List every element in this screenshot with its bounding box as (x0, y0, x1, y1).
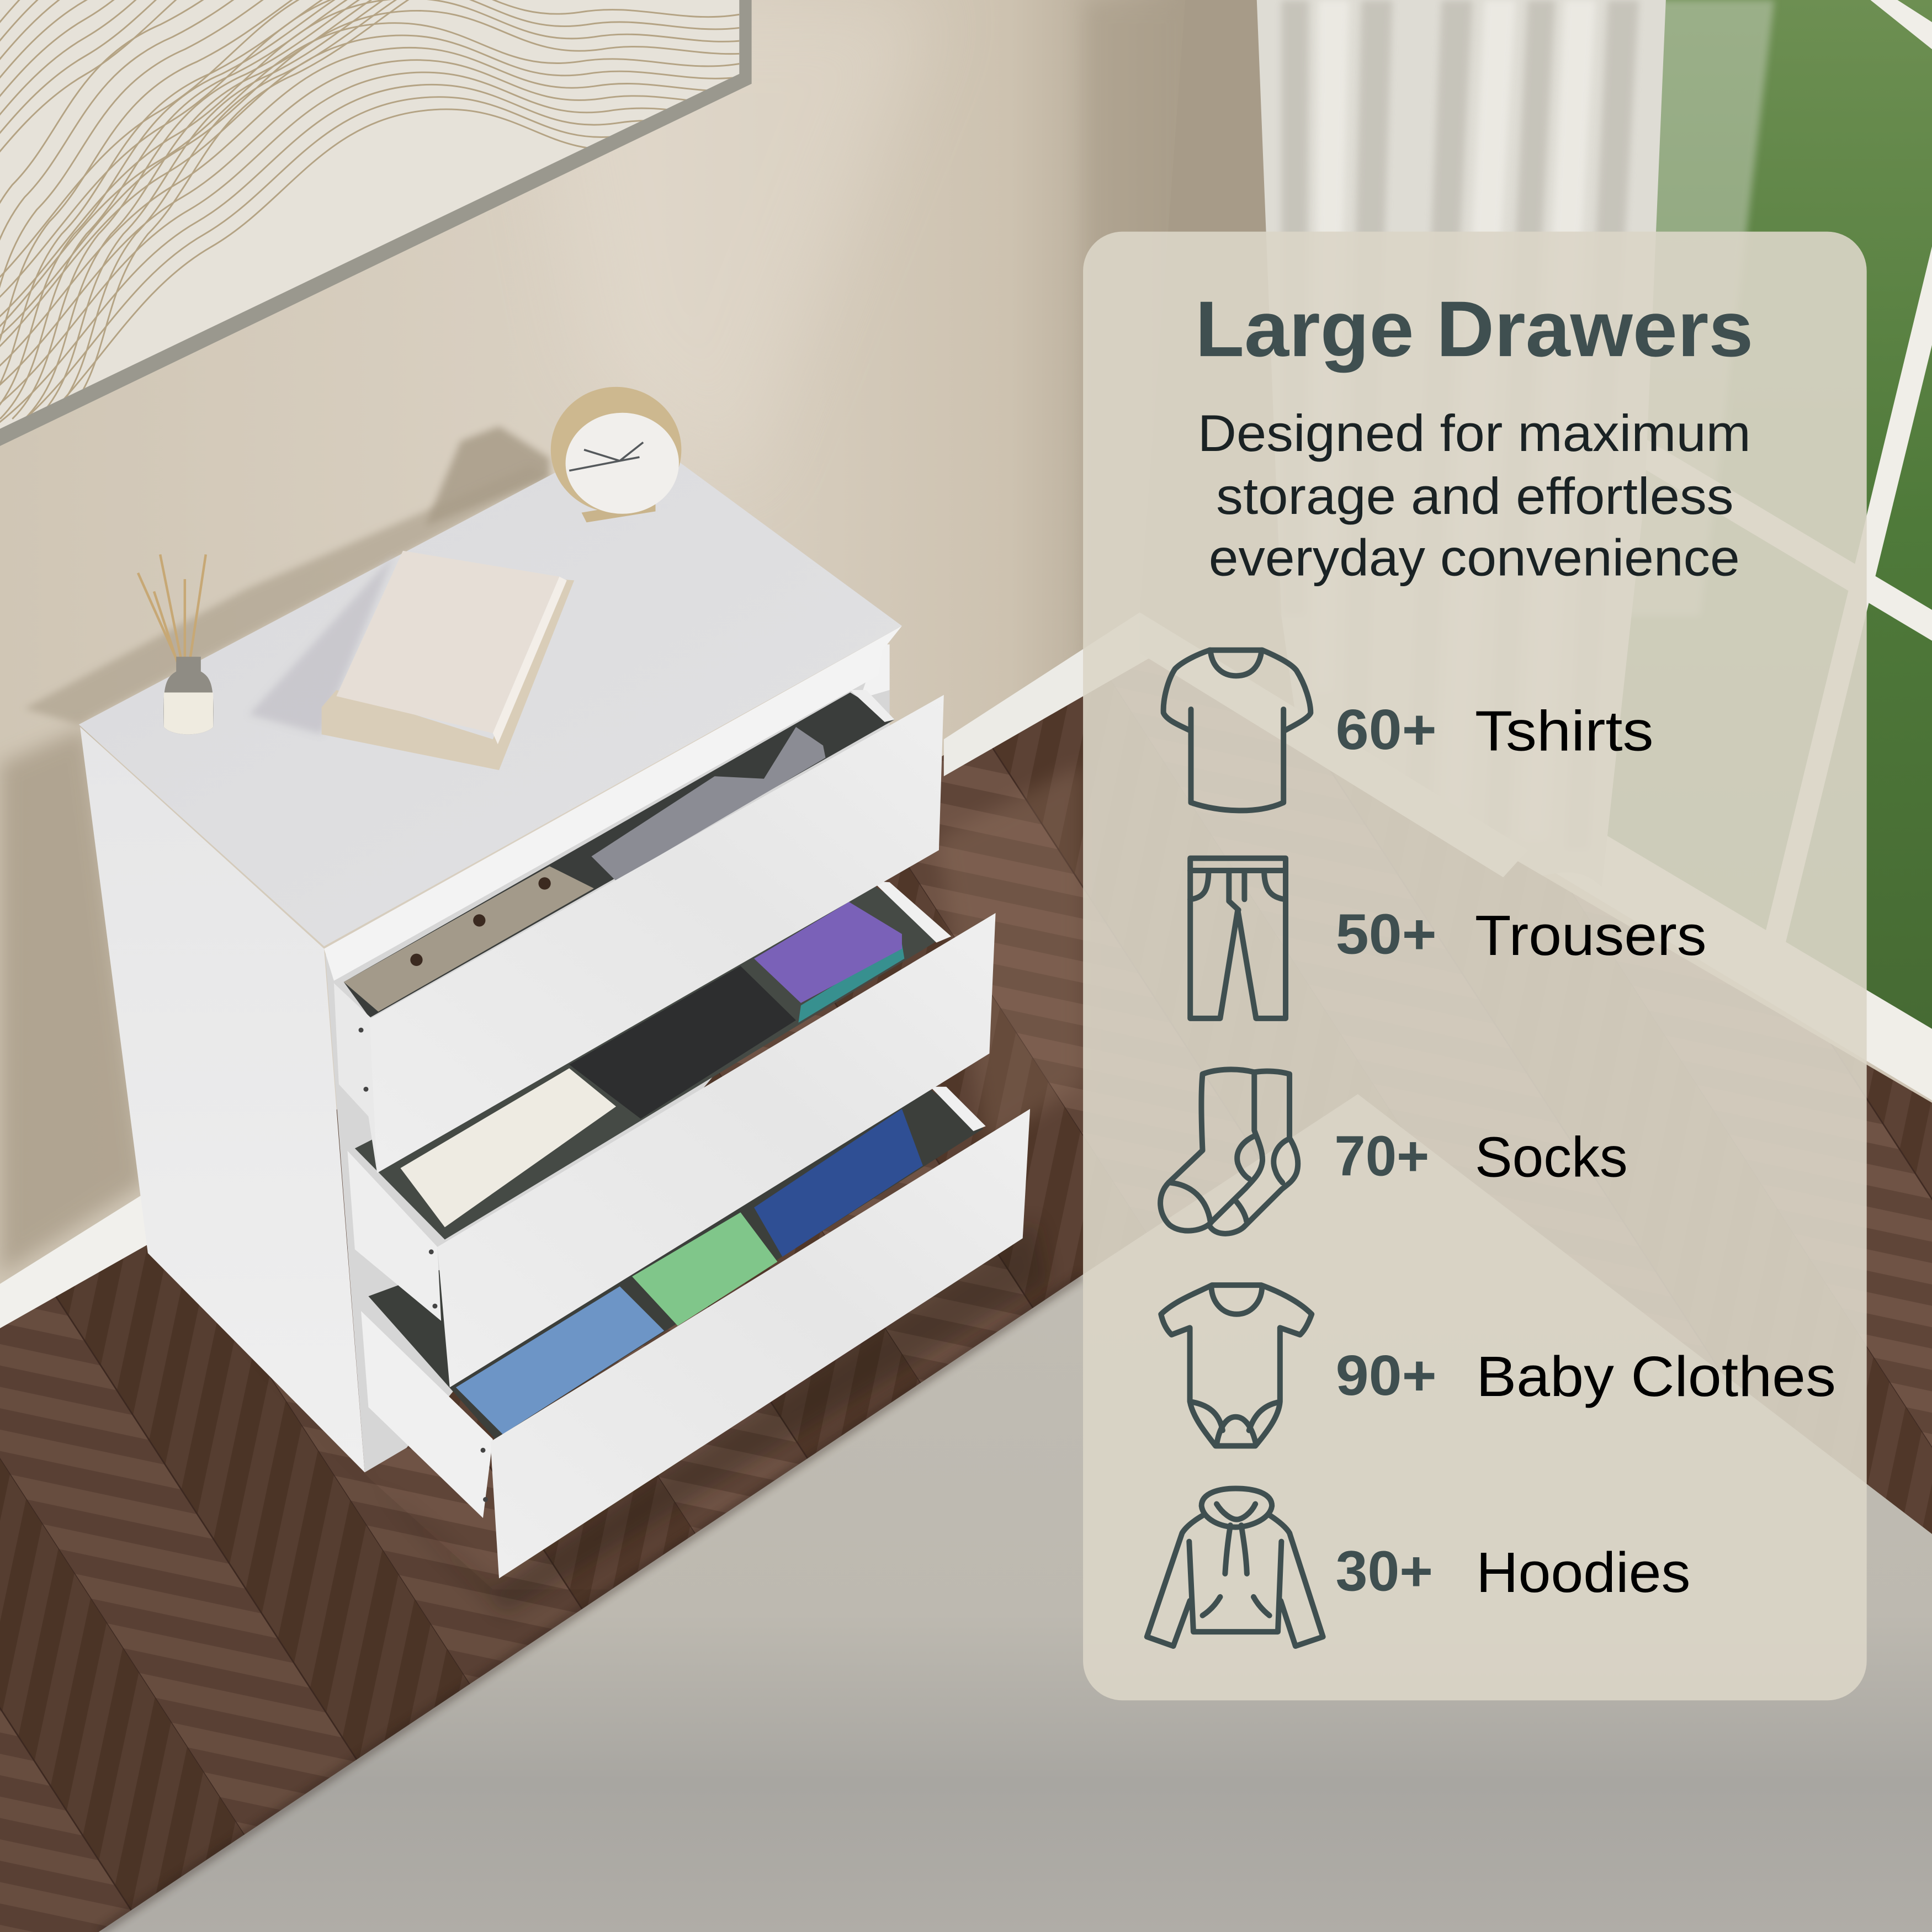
icon: hoodie (1147, 1488, 1323, 1646)
drawer 1 interior (344, 692, 895, 1018)
label: hoodies: Hoodies (1476, 1541, 1690, 1604)
drawer 3 (361, 1087, 1030, 1578)
left wall (0, 0, 1189, 1355)
green garment (632, 1212, 777, 1326)
bottle (163, 657, 214, 734)
upper book cover (336, 551, 559, 733)
icon: trousers (1190, 858, 1286, 1018)
top surface (79, 430, 902, 946)
panel: large drawers (1083, 232, 1867, 1700)
rug edge shadow (99, 1275, 1082, 1932)
drawer 3 rail (930, 1087, 986, 1131)
drawer 1 screws (359, 1028, 368, 1092)
carcass right strip (860, 644, 890, 699)
reed diffuser (138, 554, 214, 734)
clock shell (551, 387, 681, 513)
lower book (322, 579, 574, 770)
label: tshirts: Tshirts (1475, 699, 1654, 762)
clock face (566, 413, 679, 514)
wood floor (0, 641, 1932, 1932)
subtitle: storage and effortless (1216, 467, 1734, 525)
drawer 3 screws (481, 1448, 488, 1502)
upper book pages (493, 577, 567, 744)
window frame (1497, 0, 1932, 1100)
cast shadow (148, 1220, 1047, 1614)
art canvas (0, 0, 739, 429)
drawer 1 rail (850, 690, 895, 722)
label: socks: Socks (1475, 1126, 1628, 1189)
count: 70+: 70+ (1334, 1124, 1429, 1187)
row: tshirts (1164, 650, 1654, 810)
teal garment (798, 944, 904, 1023)
knit sweater (344, 866, 594, 1012)
label: trousers: Trousers (1475, 904, 1707, 967)
row: trousers (1190, 858, 1707, 1018)
title: Large Drawers (1195, 285, 1753, 373)
art frame (0, 0, 752, 446)
top shadow of book (249, 554, 394, 734)
count: 90+: 90+ (1336, 1344, 1437, 1407)
window light reflection (1602, 0, 1774, 616)
side panel (80, 727, 365, 1472)
row: baby clothes (1161, 1285, 1836, 1446)
wall light and shadow (0, 0, 1189, 1275)
clock hands (569, 442, 643, 471)
drawer 2 interior (355, 885, 949, 1240)
row: socks (1160, 1069, 1628, 1234)
buttons (410, 877, 551, 966)
rug (99, 1094, 1932, 1932)
purple garment (754, 902, 902, 1003)
panel background (1083, 232, 1867, 1700)
drawer 2 side (347, 1151, 441, 1321)
icon: t-shirt (1164, 650, 1310, 810)
icon: baby bodysuit (1161, 1285, 1312, 1446)
drawer 2 (347, 881, 996, 1387)
front top rail (324, 626, 902, 981)
label: baby clothes: Baby Clothes (1476, 1345, 1836, 1408)
book stack (322, 551, 574, 770)
drawer 3 front (490, 1109, 1030, 1578)
drawer 2 screws (429, 1249, 437, 1309)
count: 50+: 50+ (1336, 903, 1437, 966)
drawer 1 front (370, 695, 944, 1173)
white shirt (400, 1068, 616, 1227)
icon: socks (1160, 1069, 1298, 1234)
reeds (138, 554, 206, 678)
right wall (1140, 0, 1932, 1097)
baseboard left (0, 1193, 148, 1328)
jeans (456, 1286, 664, 1434)
carcass front (325, 644, 890, 1472)
baseboard far wall (1140, 612, 1528, 877)
wall art (0, 0, 752, 446)
count: 30+: 30+ (1336, 1540, 1433, 1603)
subtitle: everyday convenience (1209, 528, 1740, 586)
drawer 3 side (361, 1311, 493, 1518)
drawer 1 (334, 690, 944, 1173)
floor lighting (0, 764, 1084, 1932)
window glass (1528, 0, 1932, 1047)
chest of drawers (79, 430, 1047, 1614)
baseboard right of dresser (944, 612, 1158, 776)
gray folded clothes (591, 727, 826, 881)
drawer 3 interior (368, 1089, 983, 1439)
desk clock (551, 387, 681, 522)
blue hoodie (754, 1109, 923, 1257)
subtitle: Designed for maximum (1198, 404, 1751, 462)
drawer 2 rail (872, 881, 951, 943)
drawer 1 side (334, 983, 377, 1173)
count: 60+: 60+ (1336, 698, 1437, 761)
bottle label (164, 692, 213, 734)
drawer 2 front (437, 913, 996, 1387)
clock base (582, 500, 656, 522)
black garment (569, 966, 796, 1119)
subtitle (1198, 404, 1751, 586)
contour lines (0, 0, 740, 423)
row: hoodies (1147, 1488, 1690, 1646)
curtain (1257, 0, 1666, 887)
